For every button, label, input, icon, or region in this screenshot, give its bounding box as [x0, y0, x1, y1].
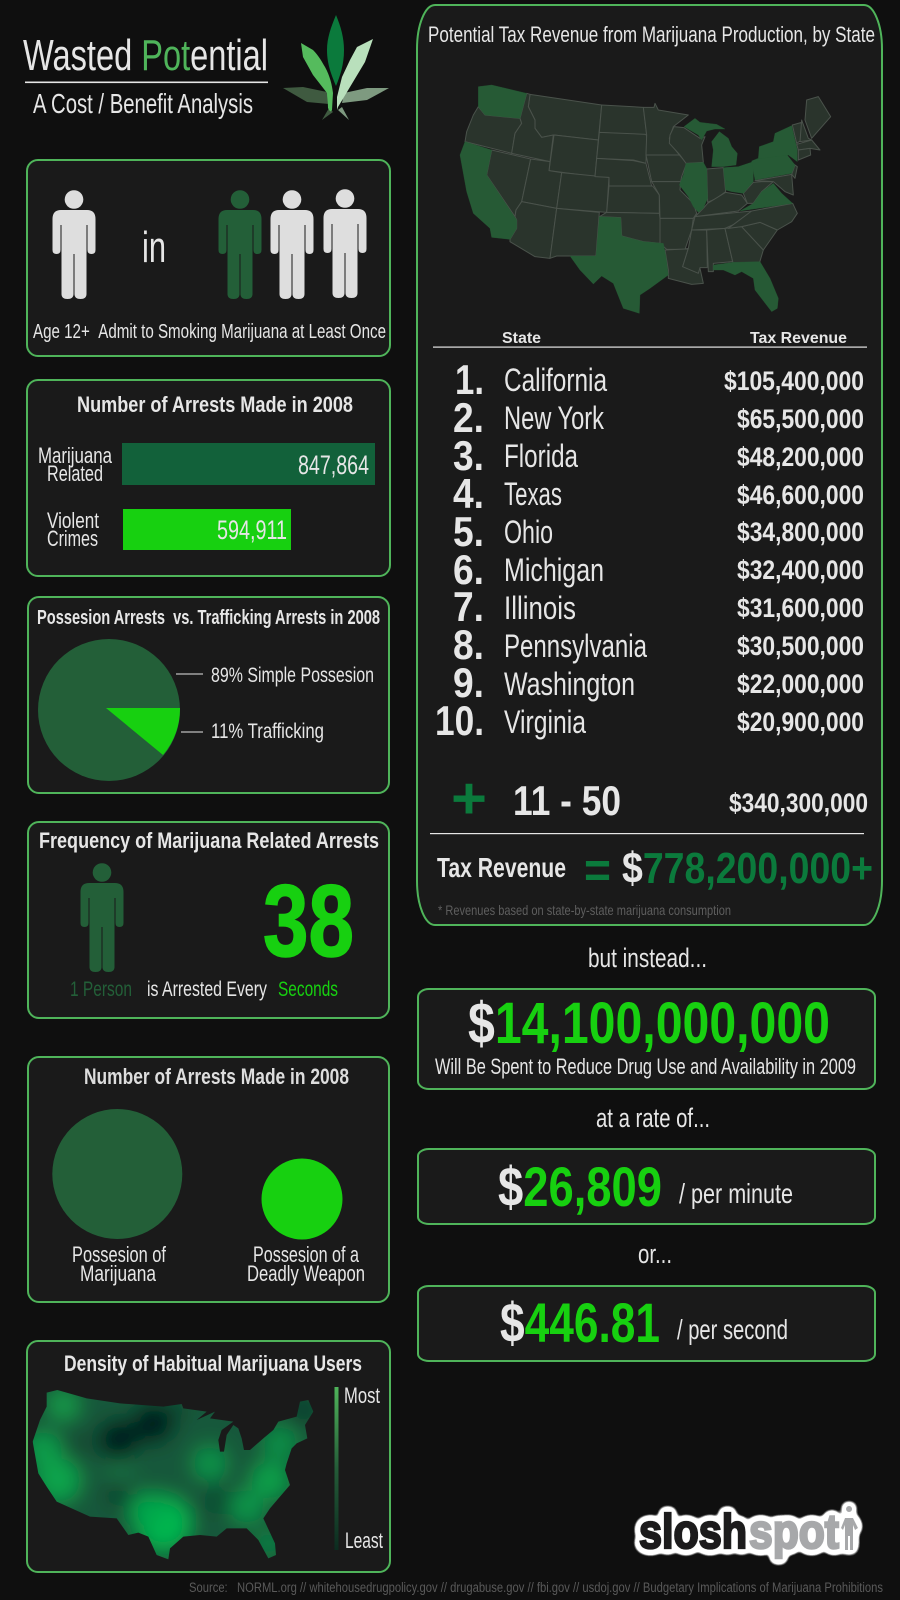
bar: violent crimes: 594,911 — [217, 515, 287, 545]
bubble: deadly weapon — [247, 1158, 365, 1286]
panel: arrests bar chart — [27, 380, 390, 576]
panel: per second — [418, 1286, 875, 1361]
caption — [70, 978, 338, 1001]
total revenue: Tax Revenue — [437, 852, 566, 883]
bar: marijuana related: 847,864 — [298, 450, 369, 480]
table rows: Washington — [504, 666, 635, 702]
table rows: $20,900,000 — [737, 707, 864, 737]
table rows: $22,000,000 — [737, 669, 864, 699]
icon: green person — [218, 190, 262, 299]
logo: sloshspot — [639, 1506, 858, 1559]
title: Wasted Potential — [23, 31, 268, 80]
title — [23, 31, 268, 119]
panel: per second: $446.81 — [500, 1291, 660, 1354]
footnote: * Revenues based on state-by-state marijuana consumption — [438, 902, 731, 918]
table rows: Ohio — [504, 514, 553, 550]
connector: or: or... — [638, 1239, 672, 1269]
bubble: deadly weapon: Possesion of a — [253, 1242, 360, 1267]
icon: green person — [80, 863, 124, 972]
table header: Tax Revenue — [750, 330, 847, 347]
connector: at a rate of: at a rate of... — [596, 1103, 710, 1133]
caption: Seconds — [278, 978, 338, 1001]
panel: age 12+ ratio — [27, 160, 390, 356]
table rows: 6. — [453, 546, 484, 593]
caption: Age 12+ Admit to Smoking Marijuana at Least Once — [33, 321, 386, 343]
table rows: Texas — [504, 476, 562, 512]
rest of states row — [430, 766, 868, 834]
bar: violent crimes — [47, 508, 291, 551]
table rows: $34,800,000 — [737, 517, 864, 547]
bubble: marijuana: Marijuana — [80, 1261, 157, 1286]
bar: marijuana related — [38, 443, 375, 486]
table rows — [435, 356, 864, 744]
in label: in — [142, 223, 166, 272]
table header: State — [502, 330, 541, 347]
rest of states row: 11 - 50 — [513, 777, 621, 824]
subtitle: A Cost / Benefit Analysis — [33, 88, 253, 119]
US state map — [460, 85, 831, 313]
table rows: 7. — [453, 583, 484, 630]
heading: Number of Arrests Made in 2008 — [77, 392, 353, 417]
table rows: 9. — [453, 659, 484, 706]
icon: person — [52, 190, 96, 299]
bar: marijuana related: Marijuana — [38, 443, 113, 468]
table rows: 5. — [453, 508, 484, 555]
panel: arrests bubbles — [28, 1057, 389, 1302]
pie chart — [38, 639, 180, 781]
rest of states row: $340,300,000 — [729, 788, 868, 818]
table rows: $48,200,000 — [737, 442, 864, 472]
connector: but instead: but instead... — [588, 943, 707, 973]
table rows: Illinois — [504, 590, 576, 626]
table header — [433, 330, 867, 348]
table rows: $30,500,000 — [737, 631, 864, 661]
panel: per minute — [418, 1149, 875, 1224]
table rows: $65,500,000 — [737, 404, 864, 434]
icon: person 2 — [270, 190, 314, 299]
table rows: 8. — [453, 621, 484, 668]
table rows: $46,600,000 — [737, 480, 864, 510]
heading: Density of Habitual Marijuana Users — [64, 1351, 362, 1376]
legend — [334, 1383, 383, 1553]
panel: per minute: $26,809 — [498, 1155, 662, 1218]
panel: possession vs trafficking pie — [28, 597, 389, 793]
caption: is Arrested Every — [147, 978, 267, 1001]
heading: Number of Arrests Made in 2008 — [84, 1064, 349, 1089]
table rows: Pennsylvania — [504, 628, 647, 664]
bubble: deadly weapon: Deadly Weapon — [247, 1261, 365, 1286]
panel: total spending — [418, 989, 875, 1089]
rest of states row: + — [451, 766, 487, 831]
panel: total spending: $14,100,000,000 — [468, 991, 830, 1056]
label: trafficking: 11% Trafficking — [211, 720, 324, 743]
table rows: $32,400,000 — [737, 555, 864, 585]
table rows: 2. — [453, 394, 484, 441]
icon: person 3 — [324, 189, 366, 298]
panel: per minute: / per minute — [679, 1178, 793, 1209]
table rows: 1. — [455, 356, 484, 403]
bubble: marijuana — [52, 1109, 182, 1286]
table rows: Florida — [504, 438, 578, 474]
table rows: Virginia — [504, 704, 586, 740]
logo: sloshspot: spot — [749, 1506, 839, 1559]
panel: tax revenue — [417, 5, 882, 925]
panel: arrest frequency — [28, 822, 389, 1018]
total revenue — [437, 842, 873, 898]
heading: Frequency of Marijuana Related Arrests — [39, 828, 379, 853]
label: simple possession: 89% Simple Possesion — [211, 664, 374, 687]
panel: per second: / per second — [677, 1314, 788, 1345]
legend: Least — [345, 1528, 383, 1553]
bubble: marijuana: Possesion of — [72, 1242, 167, 1267]
total revenue: = — [584, 842, 611, 898]
bar: violent crimes: Crimes — [47, 526, 98, 551]
panel: density map — [26, 1340, 391, 1573]
big number: 38 — [263, 864, 354, 978]
table rows: Michigan — [504, 552, 604, 588]
table rows: California — [504, 362, 607, 398]
logo: sloshspot: slosh — [639, 1506, 747, 1559]
table rows: New York — [504, 400, 605, 436]
bar: marijuana related: Related — [47, 461, 103, 486]
table rows: 4. — [453, 470, 484, 517]
icon: cannabis leaf — [283, 15, 389, 120]
table rows: 10. — [435, 697, 484, 744]
bar: violent crimes: Violent — [47, 508, 99, 533]
heat map — [32, 1390, 314, 1560]
table rows: 3. — [453, 432, 484, 479]
heading: Possesion Arrests vs. Trafficking Arrests in 2008 — [37, 607, 380, 629]
table rows: $105,400,000 — [724, 366, 864, 396]
legend: Most — [344, 1383, 380, 1408]
caption: 1 Person — [70, 978, 132, 1001]
table rows: $31,600,000 — [737, 593, 864, 623]
